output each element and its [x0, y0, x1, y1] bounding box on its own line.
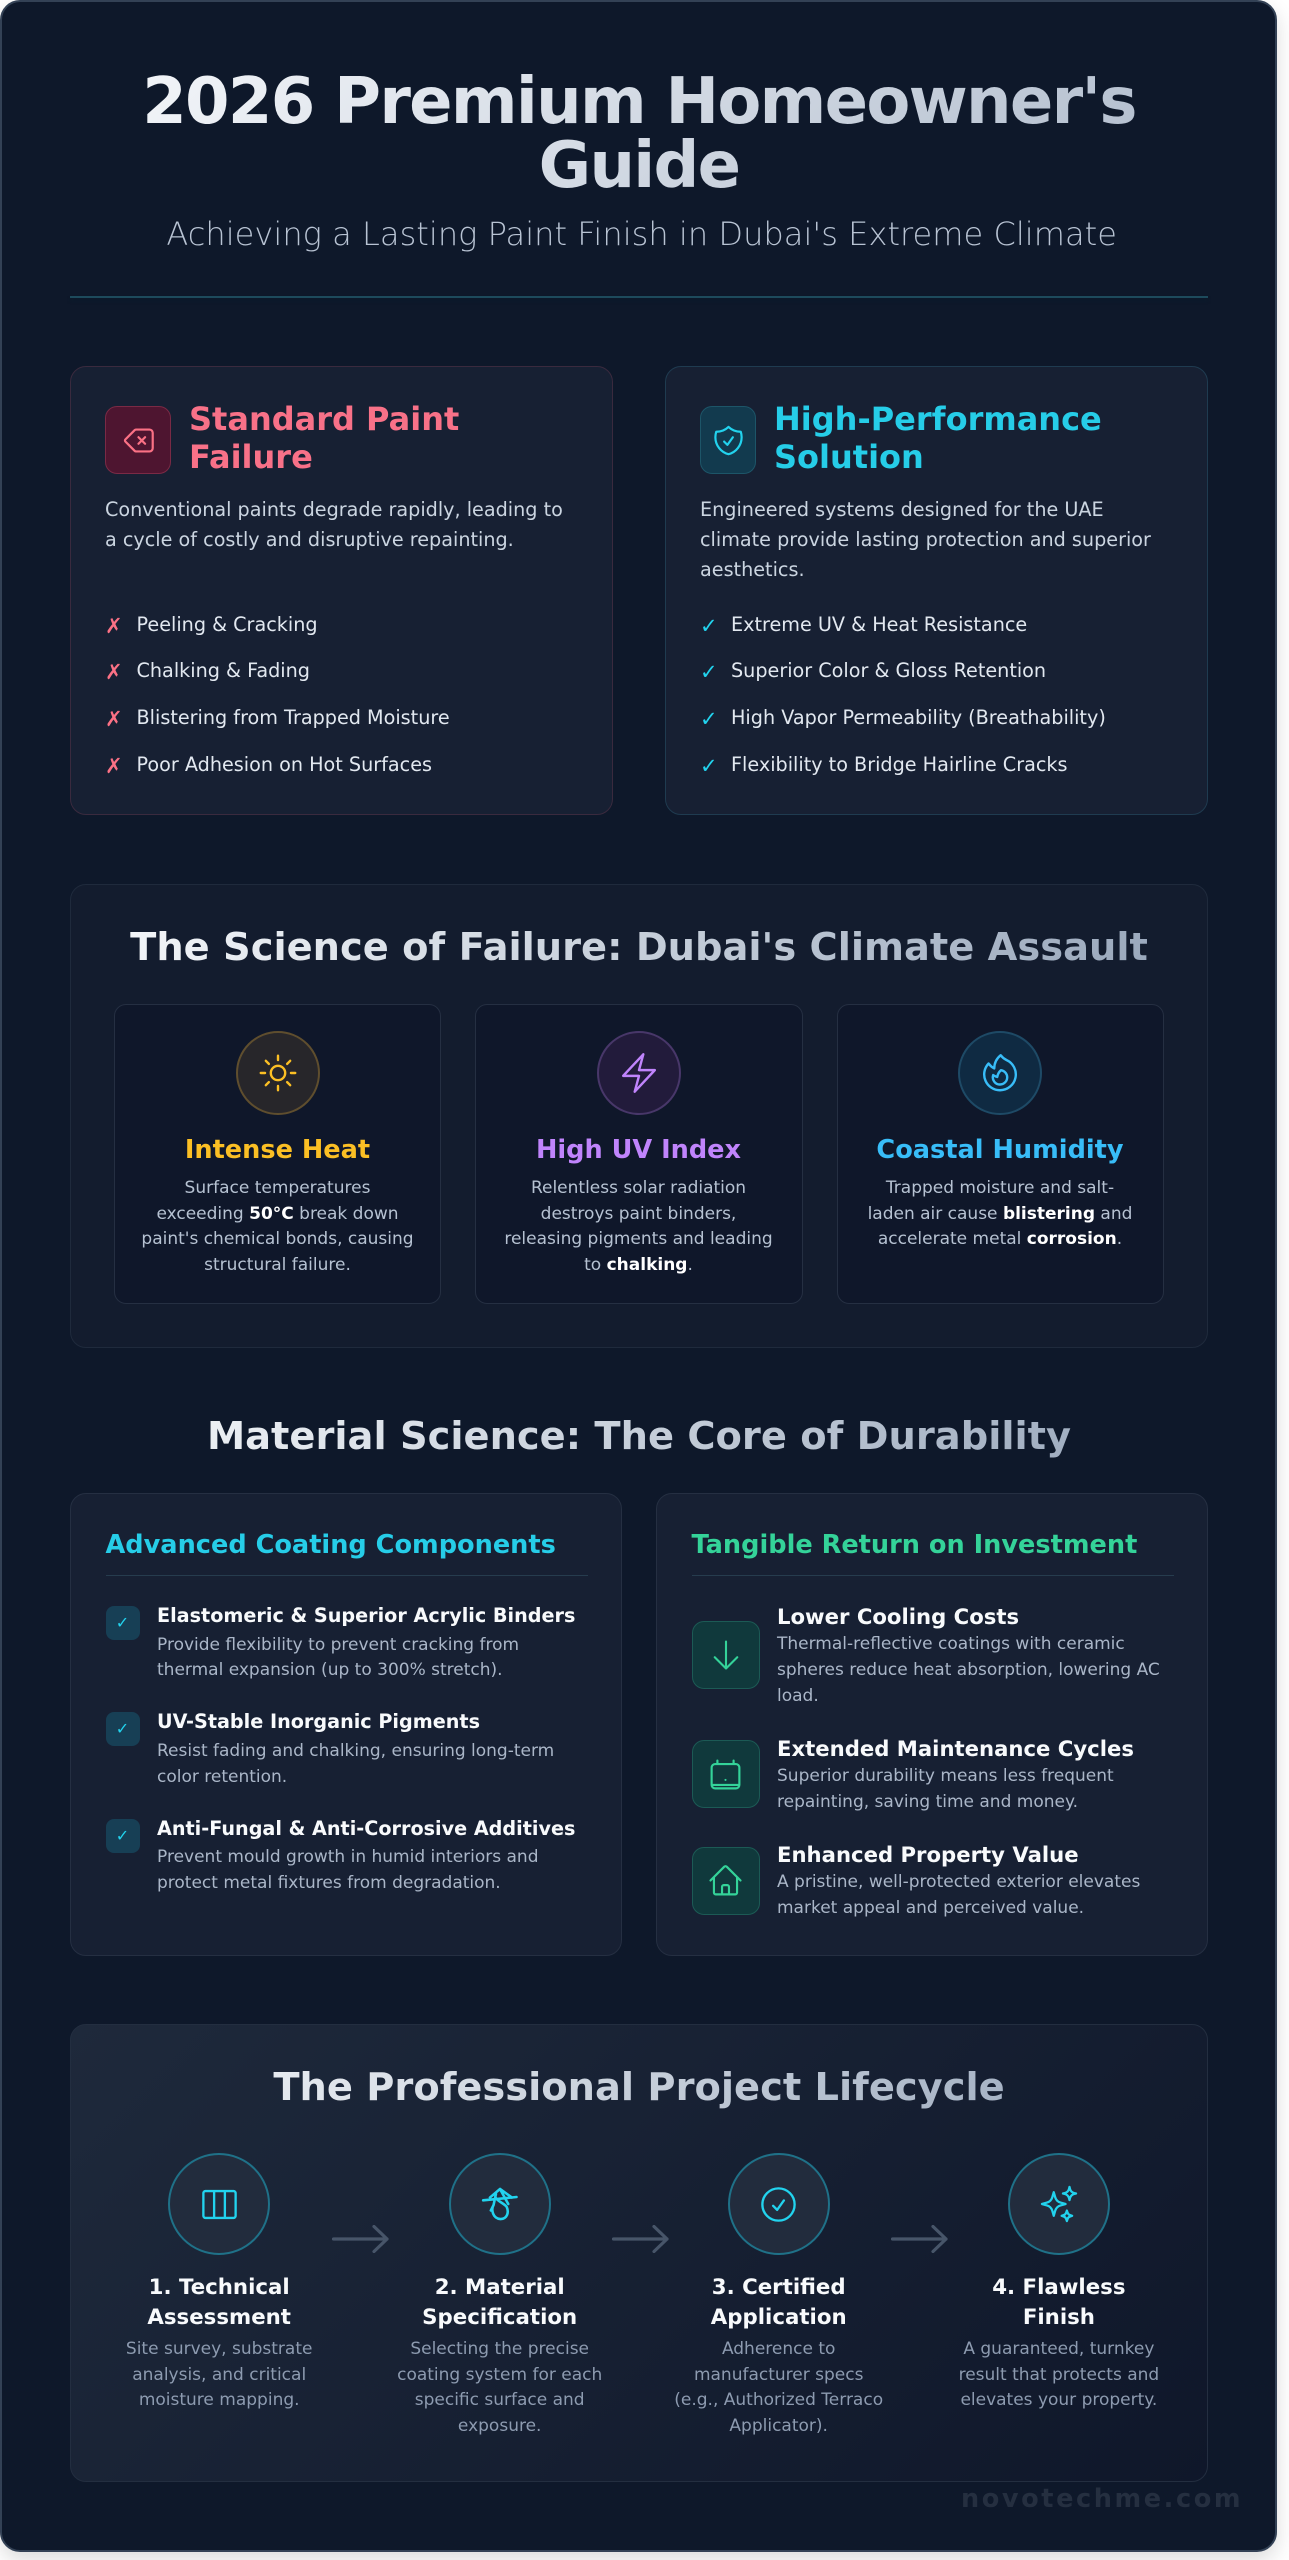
- step 1 text: moisture mapping.: [139, 2390, 300, 2410]
- header divider: [70, 296, 1208, 298]
- benefits list: ✓: [700, 707, 718, 731]
- heading: High-Performance: [774, 400, 1102, 438]
- panel: advanced coating components: [70, 1493, 622, 1956]
- step 1 title: 1. Technical: [149, 2274, 290, 2300]
- item: additives: protect metal fixtures from degradation.: [157, 1873, 501, 1893]
- step 1 text: analysis, and critical: [132, 2365, 306, 2385]
- description: Conventional paints degrade rapidly, leading to: [105, 498, 563, 521]
- benefits list: ✓: [700, 614, 718, 638]
- step 2 text: specific surface and: [415, 2390, 585, 2410]
- card: coastal humidity: [836, 1004, 1164, 1304]
- item: pigments: UV-Stable Inorganic Pigments: [157, 1710, 480, 1733]
- step 2 title: Specification: [422, 2304, 577, 2330]
- label: intense heat: Intense Heat: [185, 1135, 370, 1165]
- failure list: Poor Adhesion on Hot Surfaces: [136, 752, 432, 776]
- icon: home: [692, 1847, 760, 1915]
- heading: [774, 400, 1102, 476]
- text: coastal humidity: laden air cause blistering and: [868, 1204, 1132, 1224]
- item: binders: [106, 1604, 575, 1680]
- benefits list: Extreme UV & Heat Resistance: [731, 612, 1027, 636]
- failure list: ✗: [105, 614, 123, 638]
- item: additives: Anti-Fungal & Anti-Corrosive Additives: [157, 1817, 575, 1840]
- item: binders: Provide flexibility to prevent cracking from: [157, 1635, 519, 1655]
- panel: science of failure: [70, 884, 1208, 1348]
- panel: standard paint failure: [70, 366, 613, 815]
- step 4 text: A guaranteed, turnkey: [963, 2339, 1154, 2359]
- step 3 text: Applicator).: [729, 2416, 828, 2436]
- subtitle: Achieving a Lasting Paint Finish in Dubai's Extreme Climate: [166, 215, 1117, 253]
- text: high uv index: destroys paint binders,: [541, 1204, 736, 1224]
- heading: science of failure: The Science of Failure: Dubai's Climate Assault: [130, 925, 1148, 970]
- card: high uv index: [475, 1004, 803, 1304]
- heading: advanced coating components: Advanced Coating Components: [106, 1530, 556, 1560]
- step 1 title: Assessment: [147, 2304, 291, 2330]
- item: enhanced property value: Enhanced Property Value: [777, 1842, 1079, 1867]
- failure list: ✗: [105, 707, 123, 731]
- description: [105, 498, 563, 551]
- watermark: novotechme.com: [961, 2484, 1243, 2514]
- text: high uv index: [504, 1178, 773, 1275]
- title: [70, 70, 1208, 198]
- step 2 text: [397, 2339, 602, 2436]
- icon: sun: [236, 1031, 320, 1115]
- text: extended maintenance cycles: [777, 1766, 1114, 1812]
- step 2 text: coating system for each: [397, 2365, 602, 2385]
- step 4 text: result that protects and: [959, 2365, 1159, 2385]
- text: coastal humidity: Trapped moisture and salt-: [886, 1178, 1114, 1198]
- step 4 title: Finish: [1023, 2304, 1095, 2330]
- item: binders: ✓: [116, 1613, 129, 1632]
- text: extended maintenance cycles: Superior durability means less frequent: [777, 1766, 1114, 1786]
- step 4 title: 4. Flawless: [992, 2274, 1126, 2300]
- label: coastal humidity: Coastal Humidity: [876, 1135, 1124, 1165]
- failure list: [105, 612, 450, 778]
- description: climate provide lasting protection and superior: [700, 528, 1151, 551]
- benefits list: High Vapor Permeability (Breathability): [731, 706, 1106, 729]
- text: high uv index: to chalking.: [584, 1255, 693, 1275]
- text: intense heat: paint's chemical bonds, causing: [141, 1229, 414, 1249]
- text: enhanced property value: [777, 1872, 1140, 1918]
- text: coastal humidity: [868, 1178, 1132, 1249]
- step 2 title: [422, 2274, 577, 2330]
- item: additives: [106, 1817, 575, 1893]
- arrow 3: [891, 2225, 948, 2253]
- icon: backspace: [105, 406, 171, 474]
- step 1 title: [147, 2274, 291, 2330]
- icon: calendar: [692, 1740, 760, 1808]
- item: additives: Prevent mould growth in humid interiors and: [157, 1847, 538, 1867]
- step 2 title: 2. Material: [435, 2274, 565, 2300]
- icon: shield check: [700, 406, 756, 474]
- card: intense heat: [114, 1004, 441, 1304]
- text: high uv index: Relentless solar radiation: [531, 1178, 746, 1198]
- panel: high-performance solution: [665, 366, 1208, 815]
- benefits list: [700, 612, 1106, 778]
- heading: tangible return on investment: Tangible Return on Investment: [692, 1530, 1137, 1560]
- text: enhanced property value: A pristine, well-protected exterior elevates: [777, 1872, 1140, 1892]
- step 1 icon: columns: [168, 2153, 270, 2255]
- failure list: ✗: [105, 660, 123, 684]
- item: additives: ✓: [116, 1826, 129, 1845]
- failure list: ✗: [105, 754, 123, 778]
- description: a cycle of costly and disruptive repainting.: [105, 528, 514, 551]
- icon: bolt: [596, 1031, 680, 1115]
- title: Guide: [539, 129, 739, 203]
- text: high uv index: releasing pigments and leading: [504, 1229, 773, 1249]
- step 2 text: exposure.: [458, 2416, 541, 2436]
- description: [700, 498, 1151, 581]
- step 3 title: 3. Certified: [712, 2274, 846, 2300]
- panel: tangible return on investment: [656, 1493, 1208, 1956]
- benefits list: ✓: [700, 754, 718, 778]
- step 3 text: Adherence to: [722, 2339, 835, 2359]
- arrow 2: [612, 2225, 669, 2253]
- text: coastal humidity: accelerate metal corrosion.: [878, 1229, 1122, 1249]
- item: pigments: ✓: [116, 1719, 129, 1738]
- step 2 text: Selecting the precise: [410, 2339, 589, 2359]
- text: intense heat: Surface temperatures: [185, 1178, 370, 1198]
- failure list: Peeling & Cracking: [136, 612, 318, 636]
- heading: Solution: [774, 438, 924, 476]
- failure list: Blistering from Trapped Moisture: [136, 706, 450, 729]
- step 4 text: elevates your property.: [960, 2390, 1157, 2410]
- item: pigments: [106, 1710, 554, 1787]
- item: binders: Elastomeric & Superior Acrylic Binders: [157, 1604, 575, 1627]
- text: lower cooling costs: spheres reduce heat absorption, lowering AC: [777, 1660, 1160, 1680]
- step 4 title: [992, 2274, 1126, 2330]
- step 3 text: manufacturer specs: [694, 2365, 863, 2385]
- step 3 title: Application: [711, 2304, 847, 2330]
- step 3 title: [710, 2274, 847, 2330]
- failure list: Chalking & Fading: [136, 659, 310, 682]
- benefits list: Flexibility to Bridge Hairline Cracks: [731, 752, 1068, 776]
- text: lower cooling costs: Thermal-reflective coatings with ceramic: [777, 1634, 1125, 1654]
- panel: project lifecycle: [70, 2024, 1208, 2482]
- text: intense heat: [141, 1178, 414, 1275]
- item: binders: thermal expansion (up to 300% stretch).: [157, 1660, 503, 1680]
- step 4 text: [959, 2339, 1159, 2410]
- icon: flame: [958, 1031, 1042, 1115]
- step 3 icon: check circle: [728, 2153, 830, 2255]
- description: Engineered systems designed for the UAE: [700, 498, 1104, 521]
- benefits list: ✓: [700, 660, 718, 684]
- step 1 text: Site survey, substrate: [126, 2339, 312, 2359]
- heading: [189, 400, 459, 476]
- arrow 1: [332, 2225, 389, 2253]
- step 3 text: [674, 2339, 883, 2436]
- benefits list: Superior Color & Gloss Retention: [731, 659, 1046, 682]
- icon: arrow down: [692, 1621, 760, 1689]
- title: 2026 Premium Homeowner's: [142, 65, 1136, 139]
- text: intense heat: exceeding 50°C break down: [156, 1204, 399, 1224]
- label: high uv index: High UV Index: [536, 1135, 741, 1165]
- step 3 text: (e.g., Authorized Terraco: [674, 2390, 883, 2410]
- heading: Standard Paint: [189, 400, 459, 438]
- step 4 icon: sparkles: [1008, 2153, 1110, 2255]
- description: aesthetics.: [700, 558, 805, 581]
- item: pigments: color retention.: [157, 1767, 287, 1787]
- step 2 icon: brush scribble: [449, 2153, 551, 2255]
- text: intense heat: structural failure.: [204, 1255, 351, 1275]
- text: lower cooling costs: load.: [777, 1686, 819, 1706]
- heading: Failure: [189, 438, 313, 476]
- heading: material science: Material Science: The Core of Durability: [207, 1414, 1071, 1458]
- heading: project lifecycle: The Professional Project Lifecycle: [273, 2065, 1005, 2110]
- text: lower cooling costs: [776, 1634, 1160, 1706]
- item: pigments: Resist fading and chalking, ensuring long-term: [157, 1741, 554, 1761]
- item: lower cooling costs: Lower Cooling Costs: [777, 1604, 1019, 1629]
- item: extended maintenance cycles: Extended Maintenance Cycles: [777, 1736, 1134, 1761]
- step 1 text: [126, 2339, 312, 2410]
- heading: project lifecycle: [70, 2065, 1208, 2111]
- text: enhanced property value: market appeal and perceived value.: [777, 1898, 1084, 1918]
- text: extended maintenance cycles: repainting, saving time and money.: [777, 1792, 1078, 1812]
